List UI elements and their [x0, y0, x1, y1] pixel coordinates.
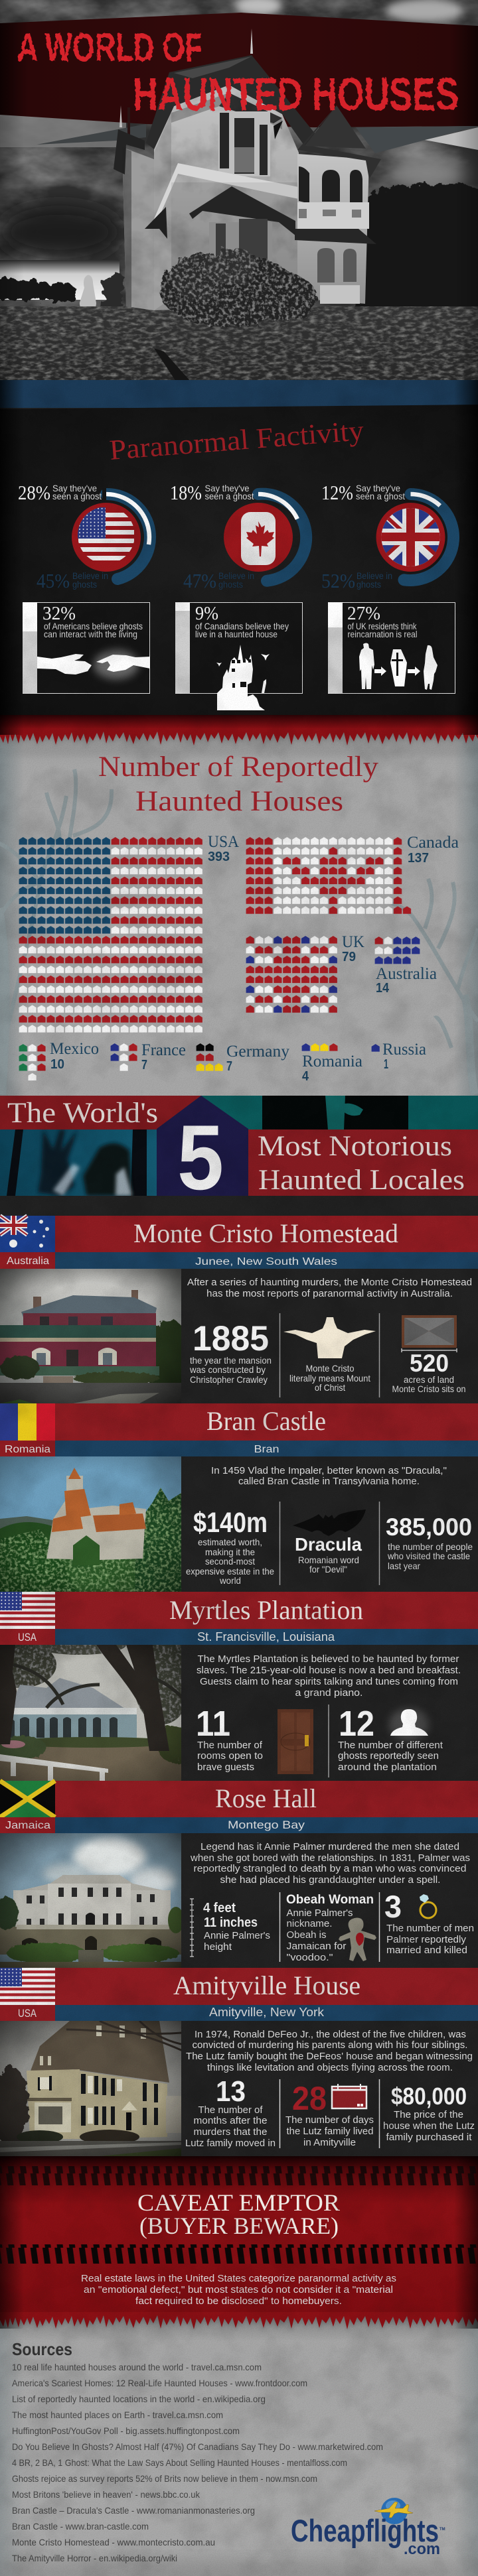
stat box: 9% Canadians: 9%: [195, 603, 218, 624]
heading: number of reportedly haunted houses: Number of Reportedly: [98, 751, 379, 783]
sources: Monte Cristo Homestead - www.montecristo.com.au: [12, 2537, 215, 2547]
location: Bran Castle: Romania: [5, 1444, 50, 1455]
panel: paranormal factivity: [0, 380, 478, 716]
stat: $140m: [186, 1507, 274, 1586]
intro text: Legend has it Annie Palmer murdered the men she dated: [200, 1841, 459, 1852]
stat: $140m: expensive estate in the: [186, 1566, 274, 1577]
stat: 3 husbands: married and killed: [386, 1945, 467, 1956]
heading: Monte Cristo Homestead: Monte Cristo Homestead: [133, 1218, 398, 1248]
stat: 13 months: murders that the: [194, 2126, 267, 2138]
icon: ghost silhouette: [389, 1708, 429, 1740]
gauge: USA: 45%: [37, 569, 70, 592]
chart: USA houses: USA: [208, 833, 239, 851]
chart: UK houses: 79: [342, 950, 356, 964]
stat: Annie Palmer's height: Annie Palmer's: [204, 1930, 270, 1941]
banner: the world's 5 most notorious: Haunted Locales: [258, 1165, 465, 1196]
banner: the world's 5 most notorious: The World's: [7, 1098, 158, 1129]
stat: 11 rooms: brave guests: [197, 1762, 254, 1773]
gauge: UK: 12%: [321, 481, 353, 504]
stat box: 32% Americans: [23, 602, 150, 694]
banner red strip: the world's: [0, 1096, 201, 1129]
stat: 385,000: the number of people: [388, 1541, 473, 1552]
sources: Bran Castle – Dracula's Castle - www.romanianmonasteries.org: [12, 2505, 255, 2516]
stat: 11 rooms: rooms open to: [197, 1750, 263, 1762]
stat: 13 months: Lutz family moved in: [185, 2138, 276, 2149]
intro text: Guests claim to hear spirits talking and tunes coming from: [200, 1676, 458, 1687]
flag: Romania: [0, 1403, 55, 1441]
stat: $140m: $140m: [193, 1507, 268, 1539]
gauge: UK: Say they've: [356, 483, 400, 493]
location: Amityville House: [0, 1968, 478, 2156]
stat: Obeah Woman: Annie Palmer's: [287, 1907, 353, 1919]
house shape with number 5: 5: [177, 1106, 224, 1209]
icon: voodoo doll: [339, 1918, 376, 1961]
hazard stripes bottom: [0, 2244, 478, 2264]
chart: Mexico houses: 10: [50, 1057, 64, 1072]
chart: UK houses: [246, 933, 364, 1015]
gauge: UK: seen a ghost: [356, 491, 405, 501]
heading: Rose Hall: Rose Hall: [215, 1783, 317, 1813]
chart: Australia houses: [374, 936, 437, 996]
flag: Jamaica: [0, 1781, 55, 1817]
stat: 1885: 1885: [193, 1319, 269, 1358]
stat: Obeah Woman: nickname.: [287, 1918, 332, 1929]
photo: Myrtles Plantation: [0, 1632, 193, 1781]
heading: caveat emptor: [137, 2189, 340, 2239]
stat: 11 rooms: [196, 1704, 263, 1773]
stat: 1885: Christopher Crawley: [190, 1374, 268, 1385]
sources: HuffingtonPost/YouGov Poll - big.assets.huffingtonpost.com: [12, 2425, 240, 2436]
stat: Annie Palmer's height: 11 inches: [204, 1915, 258, 1930]
chart: Canada houses: Canada: [407, 834, 459, 852]
chart: Mexico houses: [19, 1040, 99, 1082]
stat: $140m: estimated worth,: [198, 1537, 262, 1547]
intro text: things like levitation and objects flying across the room.: [207, 2062, 453, 2073]
gauge: Canada: 47%: [183, 569, 216, 592]
logo: Cheapflights.com: .com: [404, 2540, 440, 2558]
icon: two hands: [37, 650, 150, 679]
banner red strip: most notorious: [248, 1129, 478, 1196]
intro text: [190, 1841, 470, 1886]
stat box: 27% UK: of UK residents think: [348, 621, 417, 631]
stat: 12 ghosts: around the plantation: [338, 1762, 437, 1773]
haunted house: [114, 29, 381, 327]
intro text: slaves. The 215-year-old house is now a bed and breakfast.: [197, 1665, 461, 1676]
heading: number of reportedly haunted houses: Haunted Houses: [135, 786, 343, 817]
stat: Obeah Woman: "voodoo.": [287, 1952, 333, 1963]
heading: Amityville House: Amityville House: [173, 1970, 360, 2000]
stat: $140m: world: [219, 1575, 241, 1586]
title: A WORLD OF: [17, 25, 202, 70]
stat box: 27% UK: [328, 602, 455, 694]
gauge: USA: Believe in: [72, 570, 108, 581]
photo: Bran Castle: [0, 1456, 181, 1592]
stat: 520 acres: Monte Cristo sits on: [392, 1384, 466, 1394]
chart: Australia houses: 14: [376, 981, 390, 996]
stat: 12 ghosts: [338, 1704, 443, 1773]
chart: Romania houses: [301, 1043, 362, 1084]
icon: reincarnation sequence: [359, 643, 438, 690]
stat: 520 acres: [392, 1315, 466, 1394]
stat: 11 rooms: 11: [196, 1704, 230, 1744]
chart: UK houses: UK: [342, 933, 364, 951]
intro text: has the most reports of paranormal activity in Australia.: [206, 1288, 453, 1299]
stat: 12 ghosts: ghosts reportedly seen: [338, 1750, 439, 1762]
stat: 12 ghosts: The number of different: [338, 1740, 443, 1751]
location: Monte Cristo Homestead: [0, 1216, 478, 1403]
stat box: 32% Americans: of Americans believe ghosts: [44, 621, 143, 631]
gauge: Canada: seen a ghost: [204, 491, 254, 501]
heading: number of reportedly haunted houses: [98, 751, 379, 817]
stat: 11 rooms: The number of: [197, 1740, 263, 1751]
title: [17, 25, 459, 120]
stat box: 9% Canadians: live in a haunted house: [195, 629, 278, 639]
sources: America's Scariest Homes: 12 Real-Life Haunted Houses - www.frontdoor.com: [12, 2378, 307, 2388]
gauge: USA: [18, 481, 150, 592]
photo: Monte Cristo: [0, 1263, 193, 1403]
stat: Obeah Woman: Obeah is: [287, 1929, 327, 1941]
banner: the world's 5 most notorious: [0, 1096, 478, 1196]
location: Rose Hall: [0, 1781, 478, 1968]
flag: USA: [0, 1592, 55, 1629]
icon: ring: [420, 1894, 436, 1918]
intro text: when she got bored with the relationships. In 1831, Palmer was: [190, 1852, 470, 1864]
stat: 28 days: The number of days: [285, 2114, 374, 2126]
hero illustration: [0, 0, 478, 381]
upper windows: [218, 111, 283, 176]
stat: Dracula: Dracula: [295, 1534, 362, 1555]
panel: number of reportedly haunted houses: [0, 715, 478, 1096]
intro text: convicted of murdering his parents along with his four siblings.: [193, 2039, 467, 2051]
tree silhouettes: [0, 769, 478, 1094]
stat: $80,000: $80,000: [391, 2083, 467, 2110]
stat: Annie Palmer's height: [190, 1899, 270, 1957]
stat: 13 months: 13: [216, 2075, 246, 2108]
heading: caveat emptor: CAVEAT EMPTOR: [137, 2189, 340, 2216]
heading: Bran Castle: Bran Castle: [206, 1406, 326, 1436]
right turret: [295, 105, 381, 304]
flag: USA: [0, 1968, 55, 2005]
intro text: [186, 2029, 473, 2073]
stat: 28 days: the Lutz family lived: [287, 2126, 373, 2137]
intro text: The Myrtles Plantation is believed to be haunted by former: [198, 1653, 459, 1665]
location: Myrtles Plantation: [0, 1592, 478, 1781]
gauge: Canada: [170, 481, 306, 592]
dark band and content background: [0, 1196, 478, 2156]
gauge: USA: Say they've: [52, 483, 97, 493]
stat: $80,000: The price of the: [394, 2109, 463, 2120]
chart: Canada houses: [246, 834, 459, 916]
location: Bran Castle: Bran: [254, 1444, 279, 1455]
body text: fact required to be disclosed" to homebuyers.: [135, 2295, 342, 2307]
gauge: UK: ghosts: [357, 579, 381, 590]
stat: 13 months: The number of: [198, 2104, 263, 2116]
stat box: 32% Americans: can interact with the living: [44, 629, 137, 639]
sources: The Amityville Horror - en.wikipedia.org/wiki: [12, 2553, 177, 2563]
icon: bat: [293, 1510, 366, 1536]
location: Monte Cristo Homestead: Junee, New South Wales: [195, 1256, 337, 1267]
location: Myrtles Plantation: USA: [18, 1631, 37, 1643]
title banner: [0, 13, 478, 153]
stat: 3 husbands: 3: [384, 1889, 402, 1924]
intro text: In 1974, Ronald DeFeo Jr., the oldest of the five children, was: [195, 2029, 466, 2040]
chart: Canada houses: 137: [408, 851, 429, 866]
icon: calendar: [331, 2084, 367, 2108]
location: Bran Castle: [0, 1403, 478, 1592]
heading: Myrtles Plantation: Myrtles Plantation: [169, 1595, 363, 1625]
sources: [12, 2339, 383, 2563]
photo: Amityville house: [0, 2021, 183, 2156]
chart: Germany houses: 7: [226, 1059, 232, 1074]
sources: Do You Believe In Ghosts? Almost Half (47%) Of Canadians Say They Do - www.marketwired.com: [12, 2441, 383, 2452]
stat: 520 acres: 520: [410, 1350, 449, 1377]
sources: 4 BR, 2 BA, 1 Ghost: What the Law Says About Selling Haunted Houses - mentalfloss.com: [12, 2457, 347, 2468]
chart: Germany houses: [196, 1043, 289, 1074]
location: Rose Hall: Montego Bay: [228, 1819, 305, 1831]
panel: caveat emptor: [0, 2156, 478, 2331]
stat: Obeah Woman: Jamaican for: [287, 1941, 347, 1952]
stat box: 9% Canadians: [175, 602, 303, 710]
logo: Cheapflights.com: Cheapflights: [291, 2513, 439, 2548]
photo: Rose Hall: [0, 1833, 184, 1968]
intro text: In 1459 Vlad the Impaler, better known as "Dracula,": [211, 1465, 447, 1476]
stat: Obeah Woman: Obeah Woman: [286, 1893, 374, 1907]
stat: 385,000: who visited the castle: [387, 1551, 470, 1561]
icon: door: [278, 1709, 313, 1774]
intro text: [211, 1465, 447, 1487]
stat: Annie Palmer's height: height: [204, 1941, 232, 1953]
stat box: 32% Americans: 32%: [42, 603, 76, 624]
chart: France houses: [110, 1041, 186, 1073]
stat: 385,000: last year: [388, 1561, 420, 1571]
location: Amityville House: Amityville, New York: [209, 2006, 325, 2019]
intro text: [187, 1277, 472, 1299]
heading: caveat emptor: (BUYER BEWARE): [139, 2213, 339, 2239]
wall staining: [123, 86, 297, 308]
chart: France houses: 7: [141, 1058, 147, 1072]
banner: the world's 5 most notorious: Most Notorious: [258, 1131, 452, 1162]
stat: 1885: the year the mansion: [190, 1355, 272, 1366]
stat: $140m: making it the: [205, 1547, 255, 1557]
intro text: called Bran Castle in Transylvania home.: [238, 1476, 420, 1487]
chart: Australia houses: Australia: [376, 965, 437, 983]
chart: Russia houses: Russia: [382, 1041, 426, 1059]
intro text: reportedly strangled to death by a man who was convinced: [194, 1863, 466, 1874]
stat: $80,000: [383, 2083, 475, 2143]
text: Monte Cristo meaning: Monte Cristo: [305, 1363, 355, 1374]
stat box: 27% UK: reincarnation is real: [348, 629, 417, 639]
stat: $80,000: house when the Lutz: [383, 2120, 475, 2132]
icon: haunted house: [216, 645, 270, 710]
gauge: Canada: ghosts: [218, 579, 243, 590]
porch roof: [145, 186, 295, 275]
sources: 10 real life haunted houses around the world - travel.ca.msn.com: [12, 2362, 262, 2372]
intro text: The Lutz family bought the DeFeos' house and began witnessing: [186, 2051, 473, 2062]
chart: USA houses: 393: [208, 850, 230, 864]
stat: Obeah Woman: [286, 1893, 374, 1963]
sources: Most Britons 'believe in heaven' - news.bbc.co.uk: [12, 2489, 200, 2500]
gauge: Canada: Believe in: [218, 570, 254, 581]
chart: Romania houses: Romania: [302, 1053, 362, 1070]
gauge: UK: [321, 481, 453, 592]
stat: Dracula: [295, 1534, 362, 1575]
icon: Christ statue: [283, 1317, 376, 1358]
stat: 385,000: 385,000: [386, 1513, 472, 1541]
chart: Russia houses: 1: [384, 1057, 388, 1072]
sources: Ghosts rejoice as survey reports 52% of Brits now believe in them - now.msn.com: [12, 2473, 317, 2484]
stat: 3 husbands: [384, 1889, 474, 1956]
stat: 28 days: in Amityville: [303, 2137, 356, 2148]
stat: 3 husbands: Palmer reportedly: [386, 1934, 466, 1945]
text: Monte Cristo meaning: [289, 1363, 370, 1393]
text: Monte Cristo meaning: literally means Mount: [289, 1373, 370, 1384]
gauge: Canada: Say they've: [204, 483, 250, 493]
body text: Real estate laws in the United States categorize paranormal activity as: [81, 2273, 396, 2284]
sources: List of reportedly haunted locations in the world - en.wikipedia.org: [12, 2394, 266, 2404]
stat: 13 months: [185, 2075, 276, 2149]
chart: France houses: France: [141, 1041, 186, 1059]
stat: 1885: [189, 1319, 272, 1385]
stat: 1885: was constructed by: [189, 1364, 266, 1375]
stat: $80,000: family purchased it: [386, 2132, 472, 2143]
stat: $140m: second-most: [205, 1556, 255, 1567]
chart: Mexico houses: Mexico: [50, 1040, 99, 1058]
stat box: 27% UK: 27%: [347, 603, 380, 624]
location: Amityville House: USA: [18, 2007, 37, 2020]
stat: 12 ghosts: 12: [339, 1704, 374, 1744]
body text: [81, 2273, 396, 2307]
chart: Romania houses: 4: [302, 1069, 309, 1084]
heading: paranormal factivity: Paranormal Factivity: [108, 415, 365, 466]
gauge: USA: 28%: [18, 481, 50, 504]
stat box: 9% Canadians: of Canadians believe they: [195, 621, 289, 631]
gauge: UK: 52%: [321, 569, 355, 592]
stat: Annie Palmer's height: 4 feet: [203, 1901, 236, 1915]
stat: Dracula: for "Devil": [309, 1564, 347, 1575]
stat: 520 acres: acres of land: [404, 1374, 454, 1385]
chart: Russia houses: [371, 1041, 426, 1072]
chart: USA houses: [19, 833, 239, 1035]
flag: Australia: [0, 1216, 55, 1252]
dripping red divider: [0, 715, 478, 747]
stat: 13 months: months after the: [194, 2115, 267, 2126]
text: Monte Cristo meaning: of Christ: [315, 1382, 345, 1393]
stat: 385,000: [386, 1513, 473, 1571]
location: Monte Cristo Homestead: Australia: [7, 1256, 49, 1267]
location: Rose Hall: Jamaica: [5, 1820, 50, 1831]
stat: 3 husbands: The number of men: [386, 1923, 474, 1934]
stat: 28 days: 28: [292, 2080, 327, 2117]
body text: an "emotional defect," but most states do not consider it a "material: [84, 2284, 393, 2295]
gauge: USA: seen a ghost: [52, 491, 102, 501]
location: Myrtles Plantation: St. Francisville, Louisiana: [197, 1630, 335, 1643]
intro text: [197, 1653, 461, 1699]
intro text: she had placed his granddaughter under a spell.: [220, 1874, 441, 1886]
stat: 28 days: [285, 2080, 374, 2148]
chart: Germany houses: Germany: [226, 1043, 289, 1061]
ghost figure: [78, 275, 97, 318]
gauge: USA: ghosts: [72, 579, 97, 590]
shrubs: [159, 248, 317, 327]
gauge: UK: Believe in: [357, 570, 392, 581]
sources: The most haunted places on Earth - travel.ca.msn.com: [12, 2410, 223, 2420]
panel: sources background: [0, 2315, 478, 2576]
sources: Bran Castle - www.bran-castle.com: [12, 2521, 149, 2532]
stat: Dracula: Romanian word: [298, 1555, 359, 1565]
house shape with number 5: [157, 1096, 248, 1196]
logo: Cheapflights.com: [291, 2498, 445, 2558]
gauge: Canada: 18%: [170, 481, 202, 504]
heading: sources: Sources: [12, 2339, 72, 2359]
intro text: a grand piano.: [295, 1687, 362, 1699]
hazard stripes top: [0, 2166, 478, 2185]
intro text: After a series of haunting murders, the Monte Cristo Homestead: [187, 1277, 472, 1288]
logo: Cheapflights.com: TM: [439, 2528, 445, 2532]
